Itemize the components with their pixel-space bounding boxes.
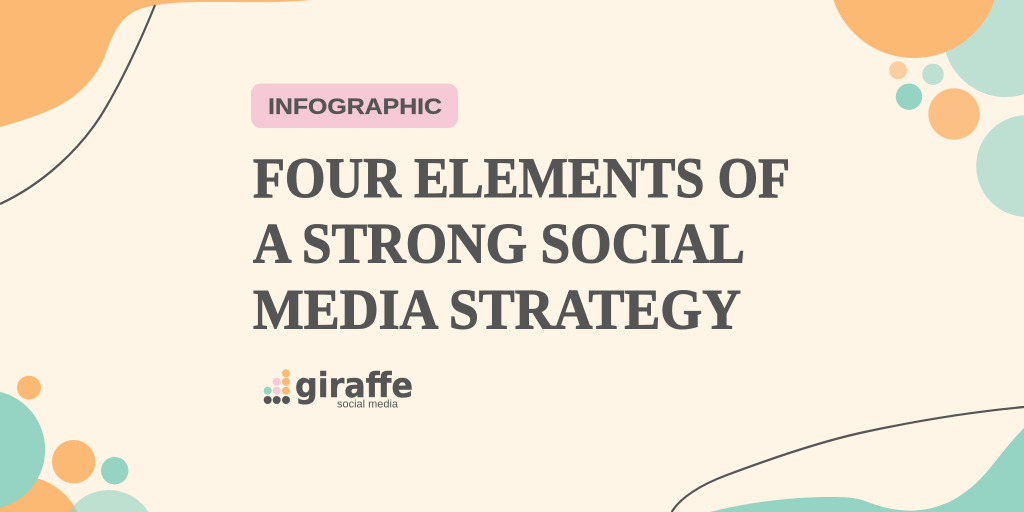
bottom-right teal blob: [710, 428, 1024, 512]
logo wordmark: giraffe: [295, 366, 413, 406]
title: A STRONG SOCIAL: [253, 213, 745, 276]
title: [253, 147, 790, 341]
top-left curved line: [0, 5, 155, 204]
bottom-left circle cluster: [0, 376, 148, 512]
icon: logo dots: [264, 369, 290, 404]
badge: infographic: INFOGRAPHIC: [268, 94, 442, 119]
top-left orange blob: [0, 0, 310, 127]
badge: infographic: [251, 84, 458, 128]
bottom-right curved line: [672, 407, 1024, 512]
title: FOUR ELEMENTS OF: [253, 147, 790, 210]
top-right circle cluster: [833, 0, 1024, 217]
title: MEDIA STRATEGY: [253, 278, 741, 341]
logo: giraffe social media: [264, 366, 413, 410]
logo tagline: social media: [337, 398, 399, 410]
